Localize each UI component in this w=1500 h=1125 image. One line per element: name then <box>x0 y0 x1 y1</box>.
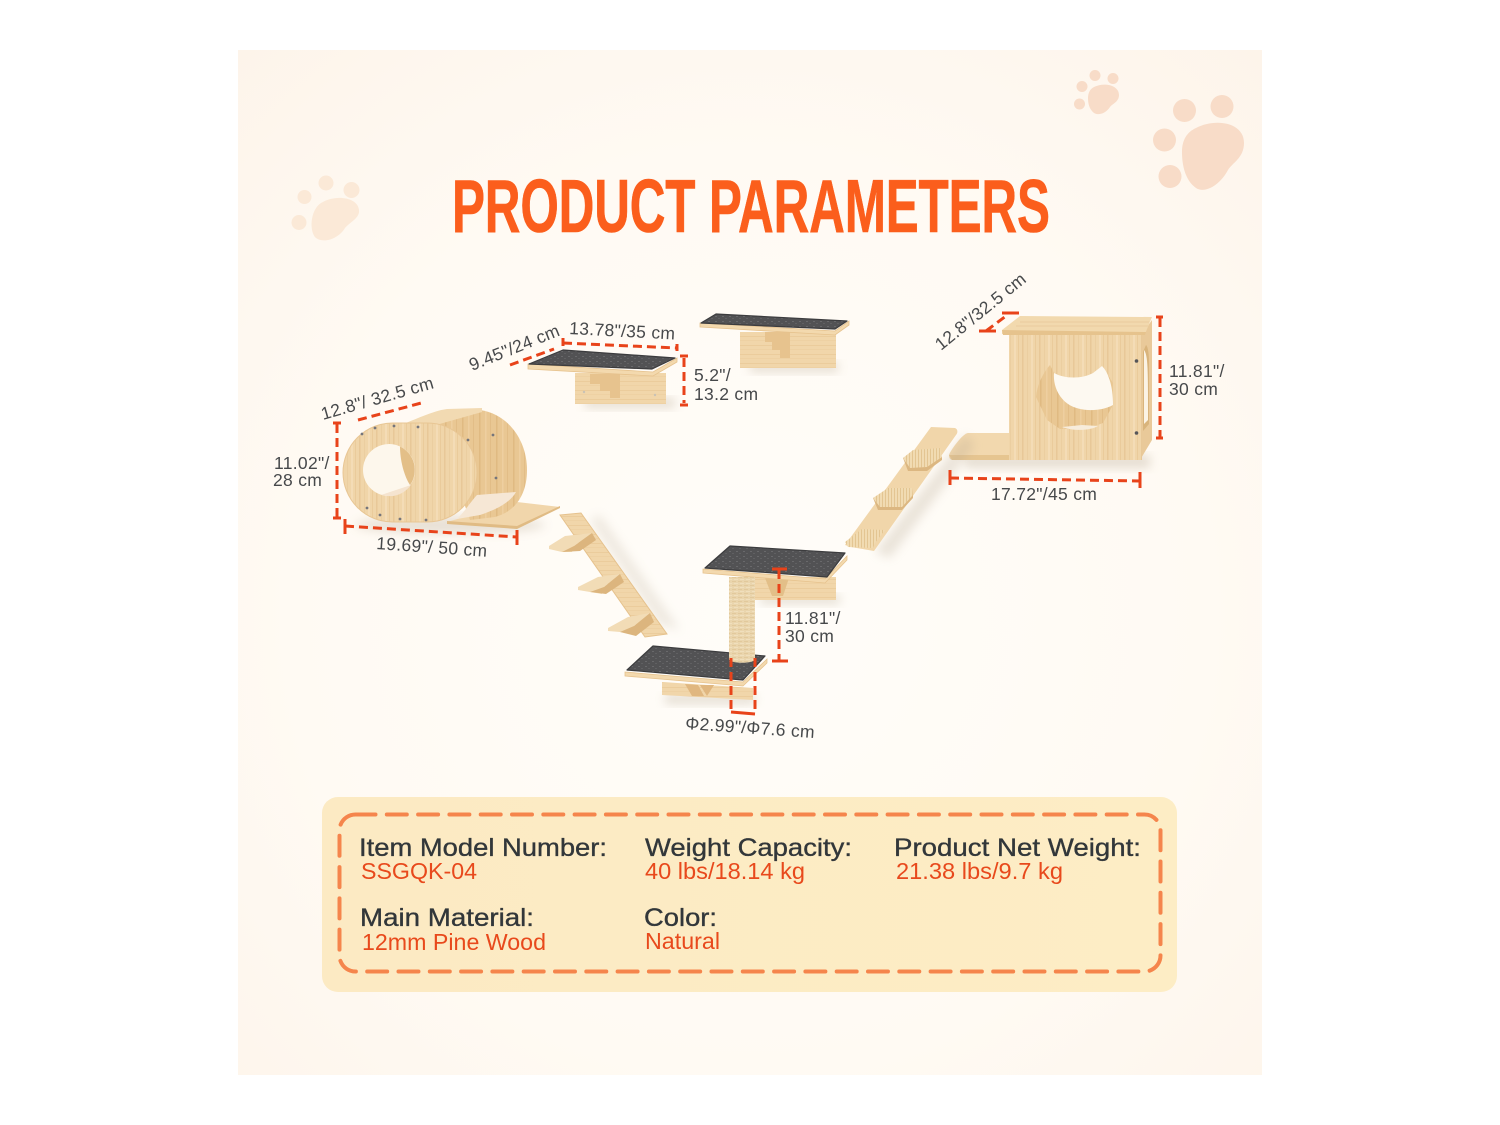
dimension: shelf top left: 5.2"/ <box>694 365 731 385</box>
shelf top centre <box>700 314 849 372</box>
item model number: SSGQK-04 <box>361 858 477 884</box>
item model number <box>359 834 607 884</box>
dimension: square house <box>931 269 1225 504</box>
main material <box>360 904 546 955</box>
dimension: perch and post: 11.81"/ <box>785 608 841 628</box>
dimension: square house: 12.8"/32.5 cm <box>931 269 1030 354</box>
dimension: square house: 17.72"/45 cm <box>991 484 1097 504</box>
dimension: perch and post <box>685 569 841 742</box>
dimension: shelf top left: 13.2 cm <box>694 384 758 404</box>
color <box>644 904 720 954</box>
dimension: round house: 12.8"/ 32.5 cm <box>319 373 436 424</box>
dimension: round house: 11.02"/ <box>274 453 330 473</box>
weight capacity: Weight Capacity: <box>645 834 852 862</box>
dimension: perch and post: 30 cm <box>785 626 834 646</box>
dimension: round house: 28 cm <box>273 470 322 490</box>
dimension: square house: 11.81"/ <box>1169 361 1225 381</box>
cat perch with scratching post <box>625 546 847 704</box>
round cat house <box>343 408 560 534</box>
icon: small paw top right <box>1074 70 1119 114</box>
ladder left <box>549 513 680 637</box>
dimension: round house: 19.69"/ 50 cm <box>376 533 488 561</box>
item model number: Item Model Number: <box>359 834 607 862</box>
product net weight: Product Net Weight: <box>894 834 1141 862</box>
weight capacity <box>645 834 852 884</box>
square cat house <box>949 316 1152 468</box>
title: PRODUCT PARAMETERS <box>452 165 1050 249</box>
parameters panel <box>322 797 1177 992</box>
dimension: shelf top left <box>466 318 758 405</box>
background panel <box>238 50 1262 1075</box>
weight capacity: 40 lbs/18.14 kg <box>645 858 805 884</box>
main material: Main Material: <box>360 904 534 932</box>
icon: paw top left <box>292 176 360 240</box>
dimension: perch and post: Φ2.99"/Φ7.6 cm <box>685 713 816 742</box>
dimension: shelf top left: 9.45"/24 cm <box>466 320 563 375</box>
main material: 12mm Pine Wood <box>362 929 546 955</box>
shelf top left <box>528 350 677 408</box>
dimension: round house <box>273 373 517 561</box>
dimension: shelf top left: 13.78"/35 cm <box>569 318 676 344</box>
icon: large paw top right <box>1153 95 1244 190</box>
color: Color: <box>644 904 717 932</box>
product net weight <box>894 834 1141 884</box>
dimension: square house: 30 cm <box>1169 379 1218 399</box>
color: Natural <box>645 928 720 954</box>
ladder right <box>845 427 975 558</box>
product net weight: 21.38 lbs/9.7 kg <box>896 858 1063 884</box>
